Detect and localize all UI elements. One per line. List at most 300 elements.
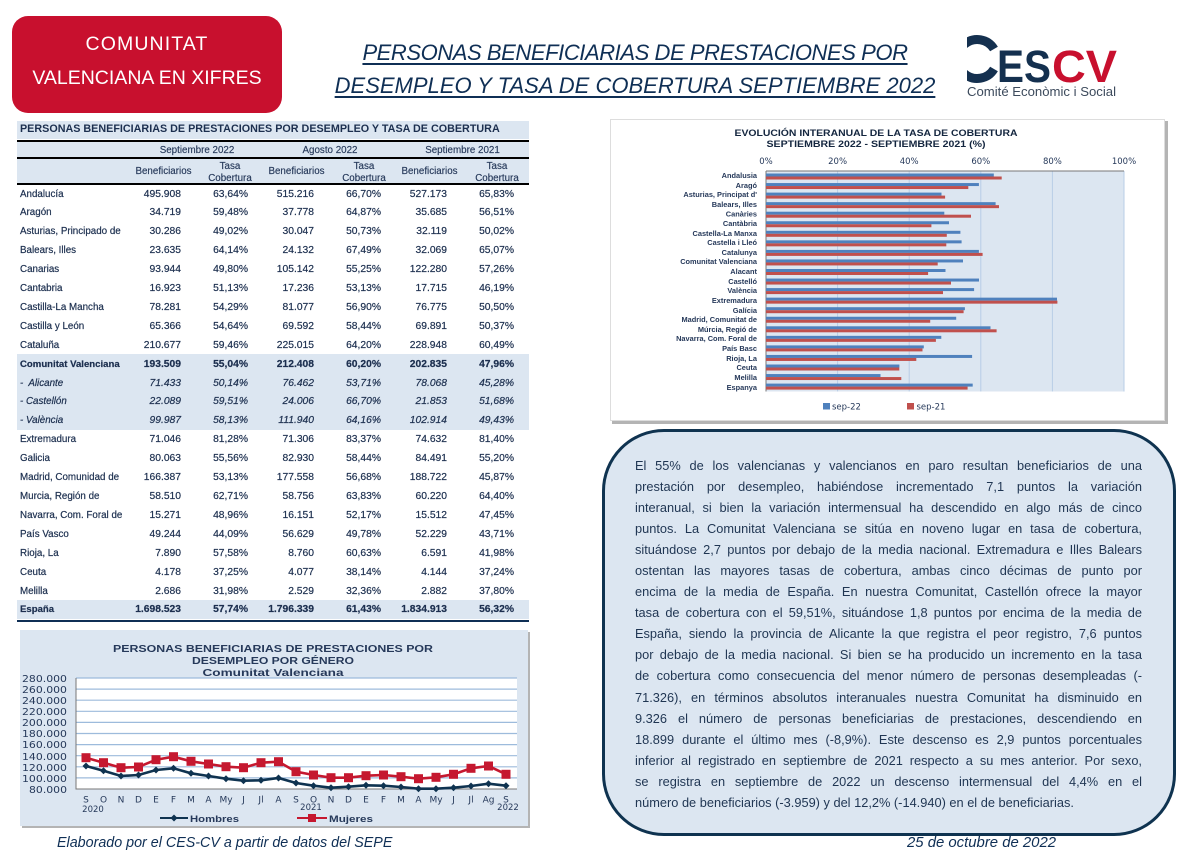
- table body: 21.853: [416, 396, 447, 407]
- table body: 57,74%: [213, 604, 248, 615]
- table column header: Beneficiarios: [268, 166, 325, 177]
- table body: 4.178: [155, 567, 181, 578]
- table body: 15.271: [150, 510, 181, 521]
- commentary text: interanual, si bien la variación intermensual ha descendido en algo más de cinco: [635, 500, 1142, 515]
- table body: 83,37%: [346, 434, 381, 445]
- table body: Galicia: [20, 453, 50, 464]
- category labels: Extremadura: [712, 296, 758, 305]
- table body: 50,73%: [346, 226, 381, 237]
- table body: 1.796.339: [268, 604, 314, 615]
- table title: PERSONAS BENEFICIARIAS DE PRESTACIONES POR DESEMPLEO Y TASA DE COBERTURA: [20, 123, 500, 135]
- chart title: EVOLUCIÓN INTERANUAL DE LA TASA DE COBERTURA: [734, 127, 1018, 139]
- x axis labels: M: [187, 796, 195, 806]
- table body: 60,20%: [346, 359, 381, 370]
- chart title: Comunitat Valenciana: [202, 668, 344, 679]
- table body: 16.151: [282, 510, 314, 521]
- table body: Murcia, Región de: [20, 491, 100, 502]
- table column header: [17, 159, 529, 185]
- table body: 64,40%: [479, 491, 514, 502]
- table period header: [17, 140, 529, 159]
- category labels: Múrcia, Regió de: [698, 325, 757, 334]
- commentary text: puntos. La Comunitat Valenciana se sitúa en noveno lugar en tasa de cobertura,: [635, 521, 1142, 536]
- table body: 15.512: [416, 510, 447, 521]
- logo: CES CV: Comité Econòmic i Social: [967, 85, 1116, 99]
- table body: 1.698.523: [135, 604, 181, 615]
- table body: 122.280: [410, 264, 447, 275]
- table body: 31,98%: [213, 586, 248, 597]
- category labels: [676, 171, 758, 392]
- table body: Balears, Illes: [20, 245, 76, 256]
- table body: 59,51%: [213, 396, 248, 407]
- logo: CES CV: [967, 35, 1117, 99]
- table body: 22.089: [150, 396, 181, 407]
- y axis labels: 260.000: [22, 685, 67, 696]
- table body: 63,83%: [346, 491, 381, 502]
- x axis labels: S: [83, 796, 89, 806]
- table body: 50,37%: [479, 321, 514, 332]
- table body: 1.834.913: [401, 604, 447, 615]
- bars: sep-21: [766, 176, 1057, 390]
- commentary text: [635, 458, 1142, 810]
- x axis labels: M: [397, 796, 405, 806]
- category labels: València: [727, 286, 758, 295]
- table body: 48,96%: [213, 510, 248, 521]
- table body: Castilla-La Mancha: [20, 302, 104, 313]
- commentary text: 71.326), en términos absolutos interanuales nuestra Comunitat ha disminuido en: [635, 690, 1142, 705]
- x axis labels: O: [100, 796, 107, 806]
- y axis labels: 160.000: [22, 740, 67, 751]
- table body: 57,58%: [213, 548, 248, 559]
- table body: 63,64%: [213, 188, 248, 200]
- table column header: Beneficiarios: [401, 166, 458, 177]
- table body: 66,70%: [346, 188, 381, 200]
- table body: 74.632: [416, 434, 447, 445]
- category labels: Balears, Illes: [712, 200, 757, 209]
- table column header: Tasa: [487, 161, 507, 172]
- table body: 111.940: [278, 415, 314, 426]
- table body: 7.890: [155, 548, 181, 559]
- table body: 24.006: [282, 396, 314, 407]
- table body: 44,09%: [213, 529, 248, 540]
- table column header: Tasa: [220, 161, 240, 172]
- category labels: Alacant: [730, 267, 758, 276]
- category labels: Canàries: [726, 210, 757, 218]
- table body: - Castellón: [20, 396, 67, 407]
- table body: 46,19%: [479, 283, 514, 294]
- x axis labels: Ag: [483, 796, 494, 806]
- commentary panel: [602, 429, 1176, 836]
- table body: 177.558: [277, 472, 314, 483]
- table period header: Septiembre 2021: [425, 145, 500, 156]
- table body: - València: [20, 415, 63, 426]
- x axis labels: Jl: [257, 796, 264, 806]
- table body: Asturias, Principado de: [20, 226, 121, 237]
- table body: 495.908: [144, 188, 181, 200]
- table body: 58,44%: [346, 453, 381, 464]
- table body: 49,78%: [346, 529, 381, 540]
- table period header: Agosto 2022: [302, 145, 358, 156]
- commentary text: 9.326 el número de personas beneficiarias de prestaciones, descendiendo en: [635, 711, 1142, 726]
- table body: 49,80%: [213, 264, 248, 275]
- table body: 50,14%: [213, 378, 248, 389]
- commentary text: inferior al registrado en septiembre de 2021 respecto a su mes anterior. Por sexo,: [635, 753, 1142, 768]
- table body: Navarra, Com. Foral de: [20, 510, 122, 521]
- table body: 78.068: [416, 378, 447, 389]
- table body: 16.923: [150, 283, 181, 294]
- table body: 78.281: [150, 302, 181, 313]
- table body: 37.778: [282, 207, 314, 218]
- table body: 71.046: [150, 434, 181, 445]
- badge: Comunitat Valenciana en xifres: COMUNITAT: [86, 33, 208, 55]
- table body: 41,98%: [479, 548, 514, 559]
- commentary text: por debajo de la media nacional. Si bien se ha producido un incremento en la tasa: [635, 647, 1142, 662]
- table body: País Vasco: [20, 529, 69, 540]
- table body: 65.366: [150, 321, 181, 332]
- table body: España: [20, 604, 54, 615]
- commentary text: 18.899 durante el último mes (-8,9%). Este descenso es 2,9 puntos porcentuales: [635, 732, 1142, 747]
- y axis labels: [22, 674, 67, 796]
- source note: Elaborado por el CES-CV a partir de datos del SEPE: [57, 835, 392, 851]
- date note: 25 de octubre de 2022: [907, 835, 1056, 851]
- x axis labels: D: [345, 796, 352, 806]
- table body: 56,32%: [479, 604, 514, 615]
- legend: [160, 814, 373, 825]
- x axis labels: E: [153, 796, 159, 806]
- legend: Hombres: [190, 814, 239, 825]
- table body: 52,17%: [346, 510, 381, 521]
- commentary text: prestación por desempleo, habiéndose incrementado 7,1 puntos la variación: [635, 479, 1142, 494]
- table body: 60,49%: [479, 340, 514, 351]
- y axis labels: 280.000: [22, 674, 67, 685]
- table body: 212.408: [277, 359, 314, 370]
- legend: [823, 402, 945, 412]
- table title: [17, 121, 529, 139]
- commentary text: número de beneficiarios (-3.959) y del 12,2% (-14.940) en el de beneficiarias.: [635, 795, 1074, 810]
- category labels: Galícia: [733, 306, 758, 315]
- table body: 60.220: [416, 491, 447, 502]
- y axis labels: 180.000: [22, 729, 67, 740]
- table body: 64,14%: [213, 245, 248, 256]
- table body: 32,36%: [346, 586, 381, 597]
- chart title: [734, 127, 1018, 150]
- table body: 66,70%: [346, 396, 381, 407]
- table body: Canarias: [20, 264, 59, 275]
- table body: - Alicante: [20, 378, 63, 389]
- table body: 54,64%: [213, 321, 248, 332]
- y axis labels: 220.000: [22, 707, 67, 718]
- badge: Comunitat Valenciana en xifres: [12, 16, 282, 113]
- table body: 69.891: [416, 321, 447, 332]
- table body: 47,96%: [479, 359, 514, 370]
- x axis labels: A: [275, 796, 282, 806]
- table body: Ceuta: [20, 567, 46, 578]
- commentary text: situándose 2,7 puntos por debajo de la media nacional. Extremadura e Illes Balears: [635, 542, 1142, 557]
- table body: 4.077: [288, 567, 314, 578]
- x axis labels: A: [205, 796, 212, 806]
- table body: 58,44%: [346, 321, 381, 332]
- table body: 76.462: [282, 378, 314, 389]
- table body: 37,24%: [479, 567, 514, 578]
- series: Hombres: [86, 766, 506, 789]
- table body: 56,90%: [346, 302, 381, 313]
- x axis labels: N: [118, 796, 124, 806]
- x axis labels: 2020: [82, 805, 104, 815]
- x axis labels: 20%: [828, 157, 847, 167]
- table body: 99.987: [150, 415, 181, 426]
- x axis labels: J: [451, 796, 455, 806]
- table body: 52.229: [416, 529, 447, 540]
- table body: 228.948: [410, 340, 447, 351]
- table body: 57,26%: [479, 264, 514, 275]
- table body: 2.686: [155, 586, 181, 597]
- x axis labels: A: [415, 796, 422, 806]
- table body: 4.144: [421, 567, 447, 578]
- table body: 105.142: [277, 264, 314, 275]
- table column header: Beneficiarios: [135, 166, 192, 177]
- table body: 81.077: [282, 302, 314, 313]
- table body: 67,49%: [346, 245, 381, 256]
- category labels: Castella i Lleó: [707, 238, 757, 247]
- table body: 17.715: [416, 283, 447, 294]
- table body: 80.063: [150, 453, 181, 464]
- category labels: Ceuta: [736, 363, 758, 372]
- table body: Comunitat Valenciana: [20, 359, 120, 370]
- table body: 71.306: [282, 434, 314, 445]
- table body: 38,14%: [346, 567, 381, 578]
- category labels: Asturias, Principat d': [683, 190, 757, 199]
- table body: 59,48%: [213, 207, 248, 218]
- table body: 55,56%: [213, 453, 248, 464]
- x axis labels: 40%: [900, 157, 919, 167]
- table body: 64,87%: [346, 207, 381, 218]
- table body: 30.047: [282, 226, 314, 237]
- table body: Rioja, La: [20, 548, 59, 559]
- x axis labels: My: [429, 796, 443, 806]
- commentary text: España, siendo la provincia de Alicante la que registra el peor registro, 7,6 puntos: [635, 626, 1142, 641]
- table body: 2.882: [421, 586, 447, 597]
- line chart panel: beneficiaries by gender: [20, 630, 530, 828]
- table body: 58.510: [150, 491, 181, 502]
- table body: 210.677: [144, 340, 181, 351]
- table body: 56,68%: [346, 472, 381, 483]
- table body: 49,43%: [479, 415, 514, 426]
- table column header: Tasa: [354, 161, 374, 172]
- table body: 6.591: [421, 548, 447, 559]
- bar chart panel: coverage rate: [610, 119, 1168, 424]
- x axis labels: 2022: [497, 803, 519, 813]
- x axis labels: Jl: [467, 796, 474, 806]
- y axis labels: 200.000: [22, 718, 67, 729]
- table period header: Septiembre 2022: [160, 145, 234, 156]
- table body: 49.244: [150, 529, 181, 540]
- commentary text: de cobertura como consecuencia del menor número de personas desempleadas (-: [635, 668, 1142, 683]
- x axis labels: F: [381, 796, 386, 806]
- table body: 32.069: [416, 245, 447, 256]
- table column header: Cobertura: [342, 173, 386, 184]
- table body: 58,13%: [213, 415, 248, 426]
- y axis labels: 100.000: [22, 774, 67, 785]
- logo: CES CV: ES: [997, 41, 1051, 92]
- table body: 55,04%: [213, 359, 248, 370]
- table body: 45,87%: [479, 472, 514, 483]
- table body: 225.015: [277, 340, 314, 351]
- chart title: PERSONAS BENEFICIARIAS DE PRESTACIONES POR: [113, 644, 434, 655]
- table body: 76.775: [416, 302, 447, 313]
- table body: 35.685: [416, 207, 447, 218]
- legend: Mujeres: [329, 814, 373, 825]
- table body: 37,25%: [213, 567, 248, 578]
- category labels: Melilla: [734, 373, 758, 382]
- table body: Melilla: [20, 586, 48, 597]
- table body: 58.756: [282, 491, 314, 502]
- category labels: Rioja, La: [726, 354, 758, 363]
- chart title: [113, 644, 434, 679]
- table body: 45,28%: [479, 378, 514, 389]
- series: Mujeres: [86, 757, 506, 779]
- table body: 43,71%: [479, 529, 514, 540]
- table body: 59,46%: [213, 340, 248, 351]
- plot area: [766, 171, 1124, 392]
- badge: Comunitat Valenciana en xifres: VALENCIANA EN XIFRES: [32, 67, 262, 89]
- table body: 55,25%: [346, 264, 381, 275]
- y axis labels: 120.000: [22, 763, 67, 774]
- x axis labels: O: [310, 796, 317, 806]
- category labels: Andalusia: [722, 171, 758, 180]
- table body: 82.930: [282, 453, 314, 464]
- table body: 30.286: [150, 226, 181, 237]
- commentary text: El 55% de los valencianas y valencianos en paro resultan beneficiarios de una: [635, 458, 1142, 473]
- table body: Castilla y León: [20, 321, 84, 332]
- table body: 51,13%: [213, 283, 248, 294]
- table body: 54,29%: [213, 302, 248, 313]
- table body: 56.629: [282, 529, 314, 540]
- table body: Extremadura: [20, 434, 76, 445]
- table body: Andalucía: [20, 188, 64, 200]
- table body: Cantabria: [20, 283, 62, 294]
- category labels: Castelló: [728, 277, 757, 286]
- chart title: SEPTIEMBRE 2022 - SEPTIEMBRE 2021 (%): [766, 139, 986, 150]
- x axis labels: My: [219, 796, 233, 806]
- table body: 60,63%: [346, 548, 381, 559]
- table column header: Cobertura: [208, 173, 252, 184]
- x axis labels: [82, 796, 519, 815]
- table body: 69.592: [282, 321, 314, 332]
- table body: 166.387: [144, 472, 181, 483]
- table body: 64,16%: [346, 415, 381, 426]
- x axis labels: 60%: [971, 157, 990, 167]
- table body: 2.529: [288, 586, 314, 597]
- table body: 93.944: [150, 264, 181, 275]
- table body: 65,83%: [479, 188, 514, 200]
- category labels: Aragó: [736, 181, 757, 190]
- category labels: Comunitat Valenciana: [680, 257, 758, 266]
- table body: 515.216: [277, 188, 314, 200]
- logo: CES CV: CV: [1052, 41, 1117, 92]
- title: DESEMPLEO Y TASA DE COBERTURA SEPTIEMBRE 2022: [335, 73, 935, 98]
- table body: 34.719: [150, 207, 181, 218]
- x axis labels: F: [171, 796, 176, 806]
- table body: [17, 188, 529, 619]
- table body: 81,40%: [479, 434, 514, 445]
- x axis labels: 80%: [1043, 157, 1062, 167]
- table body: 51,68%: [479, 396, 514, 407]
- table body: 56,51%: [479, 207, 514, 218]
- bars: sep-22: [766, 174, 1057, 387]
- table body: 24.132: [282, 245, 314, 256]
- x axis labels: N: [328, 796, 334, 806]
- table body: 32.119: [416, 226, 447, 237]
- table body: 71.433: [150, 378, 181, 389]
- table body: 61,43%: [346, 604, 381, 615]
- chart title: DESEMPLEO POR GÉNERO: [192, 654, 354, 667]
- category labels: Madrid, Comunitat de: [681, 315, 757, 324]
- table column header: Cobertura: [475, 173, 519, 184]
- x axis labels: 0%: [759, 157, 773, 167]
- table body: Cataluña: [20, 340, 59, 351]
- commentary text: se registra en septiembre de 2022 un descenso intermensual del 4,4% en el: [635, 774, 1142, 789]
- table body: 193.509: [144, 359, 181, 370]
- plot area: [76, 678, 517, 789]
- table body: 23.635: [150, 245, 181, 256]
- table body: Aragón: [20, 207, 52, 218]
- table body: 55,20%: [479, 453, 514, 464]
- commentary text: ostentan las mayores tasas de cobertura, ambas cinco décimas de punto por: [635, 563, 1142, 578]
- category labels: Navarra, Com. Foral de: [676, 334, 757, 343]
- table body: 84.491: [416, 453, 447, 464]
- table body: 202.835: [410, 359, 447, 370]
- x axis labels: D: [135, 796, 142, 806]
- category labels: Espanya: [727, 383, 758, 392]
- table body: 188.722: [410, 472, 447, 483]
- title: PERSONAS BENEFICIARIAS DE PRESTACIONES POR: [362, 40, 908, 65]
- legend: sep-21: [916, 402, 945, 412]
- category labels: Castella-La Manxa: [692, 229, 758, 238]
- category labels: País Basc: [722, 344, 757, 353]
- table body: Madrid, Comunidad de: [20, 472, 119, 483]
- x axis labels: [759, 157, 1136, 167]
- x axis labels: 100%: [1112, 157, 1136, 167]
- table body: 37,80%: [479, 586, 514, 597]
- x axis labels: 2021: [300, 803, 322, 813]
- table body: 62,71%: [213, 491, 248, 502]
- table body: 53,71%: [346, 378, 381, 389]
- table body: 64,20%: [346, 340, 381, 351]
- commentary text: tasa de cobertura con el 59,51%, situándose 1,8 puntos por encima de la media de: [635, 605, 1142, 620]
- table body: 50,02%: [479, 226, 514, 237]
- x axis labels: J: [241, 796, 245, 806]
- y axis labels: 140.000: [22, 752, 67, 763]
- table body: 49,02%: [213, 226, 248, 237]
- x axis labels: E: [363, 796, 369, 806]
- data table: [17, 121, 529, 622]
- table body: 53,13%: [346, 283, 381, 294]
- x axis labels: S: [503, 796, 509, 806]
- table bottom rule: [17, 620, 529, 622]
- commentary text: encima de la media de España. En nuestra Comunitat, Castellón ofrece la mayor: [635, 584, 1142, 599]
- table body: 50,50%: [479, 302, 514, 313]
- category labels: Catalunya: [722, 248, 758, 257]
- y axis labels: 80.000: [29, 785, 67, 796]
- table body: 8.760: [288, 548, 314, 559]
- y axis labels: 240.000: [22, 696, 67, 707]
- title: [334, 40, 936, 98]
- table body: 53,13%: [213, 472, 248, 483]
- legend: sep-22: [832, 402, 861, 412]
- category labels: Cantàbria: [723, 219, 758, 228]
- table body: 102.914: [410, 415, 447, 426]
- table body: 47,45%: [479, 510, 514, 521]
- table body: 17.236: [282, 283, 314, 294]
